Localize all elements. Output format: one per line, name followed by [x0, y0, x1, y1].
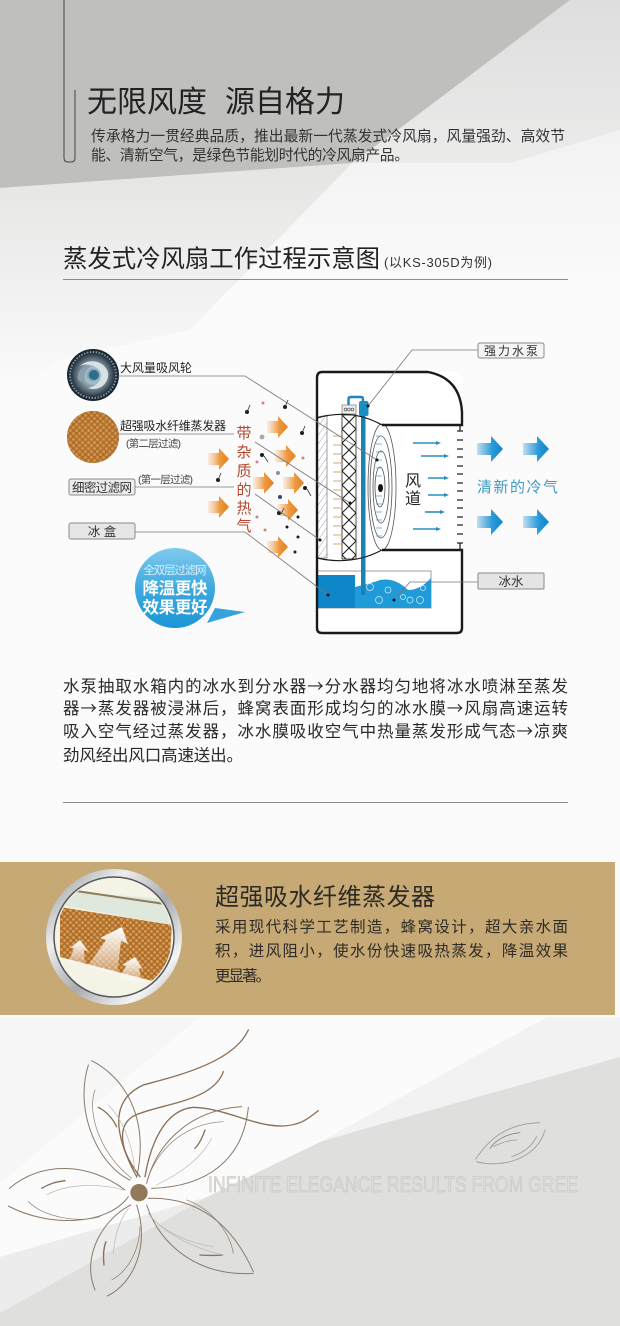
label: hot air with impurities: 热: [236, 500, 252, 517]
label: air duct: 风: [405, 473, 421, 490]
icon: fan wheel: [67, 349, 119, 401]
label: hot air with impurities: [236, 425, 252, 535]
honeycomb pad: [342, 415, 356, 559]
label: ice box: 冰 盒: [88, 524, 117, 539]
title: 无限风度: [87, 86, 207, 119]
feature heading: 超强吸水纤维蒸发器: [215, 884, 435, 911]
machine housing: [317, 372, 462, 633]
label: air duct: 道: [405, 490, 421, 508]
explanation paragraph: 吸入空气经过蒸发器，冰水膜吸收空气中热量蒸发形成气态→凉爽: [63, 718, 568, 742]
label: ice water: [478, 573, 544, 589]
explanation paragraph: 劲风经出风口高速送出。: [63, 746, 243, 765]
section heading: 蒸发式冷风扇工作过程示意图: [63, 246, 380, 273]
label: evaporator: [120, 418, 226, 450]
label: fresh cool air: 清新的冷气: [477, 479, 558, 496]
callout: double filter bubble: [135, 548, 245, 628]
water distributor: [342, 405, 356, 414]
label: fine filter: 细密过滤网: [72, 480, 132, 495]
leader lines: [118, 350, 478, 602]
airflow arrows: [413, 441, 449, 531]
section heading: (以KS-305D为例): [384, 255, 492, 270]
label: ice water: 冰水: [498, 575, 524, 589]
icon: flower line art: [8, 1030, 318, 1296]
label: hot air with impurities: 带: [236, 425, 252, 442]
feature text: [215, 918, 568, 985]
panel: evaporator feature: [0, 862, 615, 1015]
title: 源自格力: [225, 86, 345, 119]
label: air duct: [405, 473, 421, 508]
callout: double filter bubble: 全双层过滤网: [144, 563, 206, 577]
label: evaporator: (第二层过滤): [126, 437, 181, 450]
diagram: working process: [67, 343, 558, 633]
intro text: 能、清新空气，是绿色节能划时代的冷风扇产品。: [91, 147, 409, 164]
intro text: 传承格力一贯经典品质，推出最新一代蒸发式冷风扇，风量强劲、高效节: [91, 128, 565, 145]
orange drip marks: [333, 436, 341, 544]
label: fine filter: (第一层过滤): [138, 473, 193, 486]
water pump and pipe: [348, 397, 368, 595]
arrows: hot air: [208, 416, 304, 558]
label: evaporator: 超强吸水纤维蒸发器: [120, 418, 226, 433]
water tank: [317, 571, 431, 608]
label: hot air with impurities: 的: [236, 482, 252, 499]
label: fine filter: [69, 473, 193, 495]
label: fan wheel: 大风量吸风轮: [120, 361, 192, 375]
decorative bracket line: [64, 0, 75, 162]
explanation paragraph: 器→蒸发器被浸淋后，蜂窝表面形成均匀的冰水膜→风扇高速运转: [63, 695, 568, 719]
heat exchanger hatch: [317, 415, 327, 558]
callout: double filter bubble: 效果更好: [142, 598, 208, 617]
explanation paragraph: 水泵抽取水箱内的冰水到分水器→分水器均匀地将冰水喷淋至蒸发: [63, 673, 568, 697]
outlet grille: [457, 425, 463, 550]
explanation paragraph: [63, 673, 568, 765]
label: hot air with impurities: 杂: [236, 444, 252, 461]
icon: small leaf: [476, 1123, 545, 1164]
impurity particles: [216, 400, 311, 554]
feature text: 更显著。: [215, 967, 271, 985]
icon: lens with evaporator photo: [46, 869, 182, 1005]
label: hot air with impurities: 质: [236, 463, 252, 480]
callout: double filter bubble: 降温更快: [142, 579, 208, 598]
fan ellipses: [368, 424, 396, 550]
feature text: 积，进风阻小，使水份快速吸热蒸发，降温效果: [215, 942, 568, 960]
title: [87, 86, 345, 119]
icon: evaporator pad: [67, 411, 119, 463]
label: water pump: 强力水泵: [484, 344, 538, 358]
label: hot air with impurities: 气: [236, 518, 252, 535]
label: ice box: [69, 523, 135, 539]
machine cross-section: [317, 372, 463, 633]
feature text: 采用现代科学工艺制造，蜂窝设计，超大亲水面: [215, 918, 568, 936]
arrows: cool air: [477, 436, 549, 535]
intro text: [91, 128, 565, 164]
